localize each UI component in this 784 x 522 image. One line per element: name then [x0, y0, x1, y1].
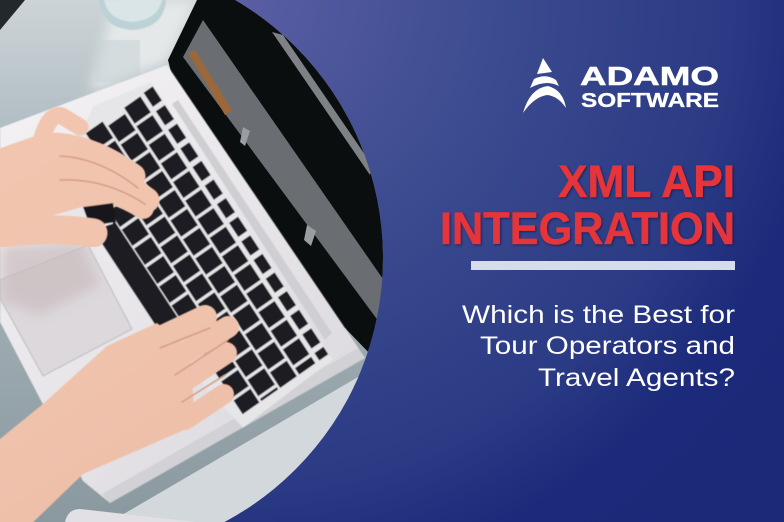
finger shadows [160, 328, 228, 402]
water glass [95, 0, 166, 82]
thumb [0, 230, 93, 234]
keyboard [83, 84, 332, 428]
hand: upper [0, 115, 147, 235]
finger shadows [60, 156, 145, 204]
divider bar [471, 261, 735, 270]
circular laptop photo [0, 0, 383, 522]
laptop base [0, 65, 365, 503]
title [440, 156, 735, 254]
subtitle: Travel Agents? [538, 364, 735, 392]
title: XML API [558, 156, 735, 207]
laptop screen [168, 0, 383, 352]
subtitle [462, 301, 735, 392]
key and palm rest gap by thumb [54, 206, 114, 227]
desk surface [0, 0, 383, 522]
logo icon [523, 58, 566, 113]
logo wordmark: ADAMO [580, 61, 719, 91]
logo [523, 58, 719, 113]
title: INTEGRATION [440, 203, 735, 254]
trackpad [0, 245, 132, 376]
logo: SOFTWARE [581, 90, 719, 112]
subtitle: Tour Operators and [480, 332, 735, 360]
hand: lower [0, 317, 228, 522]
subtitle: Which is the Best for [462, 301, 735, 329]
keys [83, 84, 332, 428]
second device at bottom [65, 509, 195, 522]
